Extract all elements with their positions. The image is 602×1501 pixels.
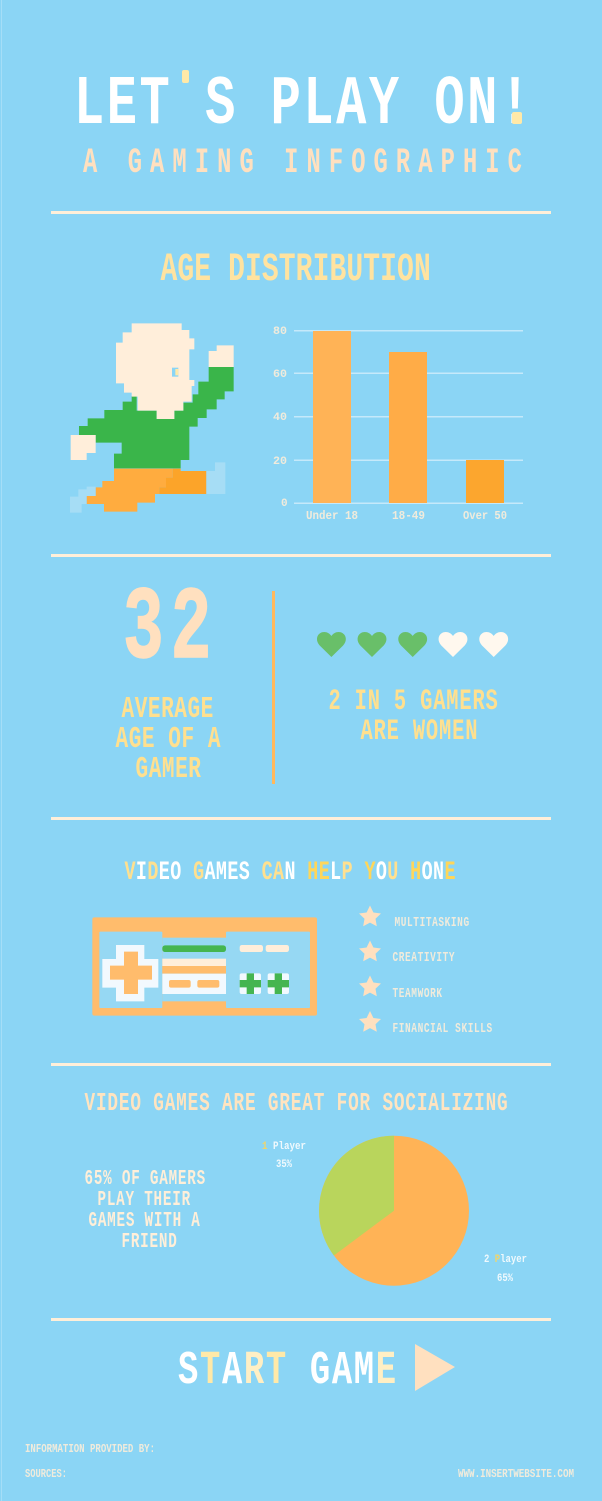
pie chart: players: 35% <box>276 1159 292 1171</box>
footer credits: SOURCES: <box>25 1468 67 1481</box>
stat: average age <box>116 572 221 786</box>
bar chart: age distribution: 0 <box>281 498 288 510</box>
stat: average age: AVERAGE <box>122 691 214 726</box>
icon: pixel gamer character <box>70 323 234 513</box>
stat: gamers who are women: 2 IN 5 GAMERS <box>328 684 499 718</box>
text block: play with a friend: PLAY THEIR <box>98 1189 191 1212</box>
bar chart: age distribution: 18-49 <box>392 509 425 523</box>
bar chart: age distribution: Over 50 <box>463 509 507 523</box>
vertical divider <box>272 591 275 784</box>
list: skills <box>359 906 493 1037</box>
text block: play with a friend: GAMES WITH A <box>88 1210 201 1233</box>
pie chart: players: 2 Player <box>484 1254 527 1266</box>
bar chart: age distribution: 40 <box>273 412 287 424</box>
list: skills: FINANCIAL SKILLS <box>392 1022 493 1037</box>
list: skills: CREATIVITY <box>392 951 455 966</box>
stat: average age: 32 <box>123 572 218 689</box>
text block: play with a friend <box>84 1168 206 1254</box>
footer credits: WWW.INSERTWEBSITE.COM <box>458 1468 574 1481</box>
title: LET'S PLAY ON! <box>74 66 533 145</box>
footer credits <box>25 1443 574 1481</box>
stat: average age: AGE OF A <box>116 721 221 756</box>
pie chart: players <box>262 1136 527 1286</box>
stat: average age: GAMER <box>136 751 201 786</box>
icon: game controller <box>92 917 317 1016</box>
stat: gamers who are women <box>328 684 499 748</box>
list: skills: MULTITASKING <box>394 916 470 931</box>
pie chart: players: 1 Player <box>262 1141 306 1153</box>
text block: play with a friend: FRIEND <box>122 1231 178 1254</box>
bar chart: age distribution: 20 <box>273 456 287 468</box>
text block: play with a friend: 65% OF GAMERS <box>84 1168 206 1191</box>
bar chart: age distribution: Under 18 <box>306 509 358 523</box>
stat: gamers who are women: ARE WOMEN <box>360 714 478 748</box>
footer credits: INFORMATION PROVIDED BY: <box>25 1443 155 1456</box>
list: skills: TEAMWORK <box>392 987 443 1002</box>
heading: skills: VIDEO GAMES CAN HELP YOU HONE <box>124 857 456 887</box>
bar chart: age distribution: 60 <box>273 369 287 381</box>
heading: socializing: VIDEO GAMES ARE GREAT FOR SOCIALIZING <box>84 1088 509 1118</box>
heading: age distribution: AGE DISTRIBUTION <box>160 248 431 293</box>
subtitle: A GAMING INFOGRAPHIC <box>83 143 530 183</box>
icon row: five hearts <box>317 632 508 657</box>
bar chart: age distribution <box>273 326 523 523</box>
bar chart: age distribution: 80 <box>273 326 287 338</box>
pie chart: players: 65% <box>497 1273 513 1285</box>
call to action: start game: START GAME <box>178 1345 398 1398</box>
